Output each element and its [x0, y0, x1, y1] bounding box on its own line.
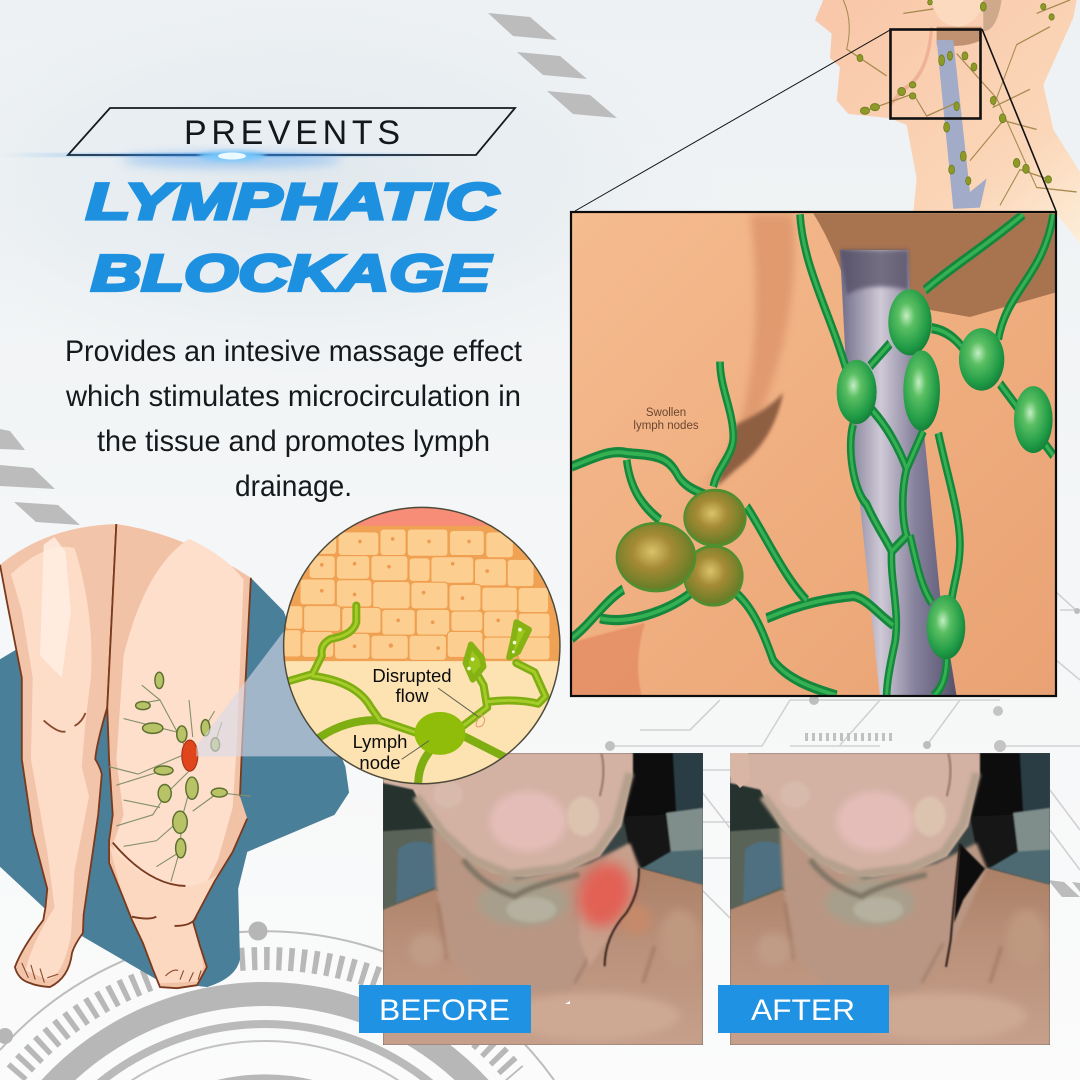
circular tech ring [0, 922, 554, 1080]
green lymph nodes [837, 289, 1053, 659]
photo: after [730, 753, 1050, 1045]
neck illustration top right [815, 0, 1080, 243]
zoom connector lines [575, 29, 1056, 211]
circle labels: Lymph [353, 731, 407, 752]
title: LYMPHATIC [86, 173, 500, 230]
swollen nodes [617, 490, 746, 605]
description text [65, 335, 523, 503]
label: after [718, 985, 889, 1033]
label: after: AFTER [751, 994, 855, 1027]
skin cells [284, 529, 550, 660]
circle labels: node [359, 752, 401, 773]
blocked sacs [465, 622, 529, 680]
description text: Provides an intesive massage effect [65, 335, 523, 368]
lymph node [415, 712, 465, 755]
lymph branches [109, 685, 251, 882]
panel label: lymph nodes [633, 420, 699, 432]
vein [840, 250, 957, 696]
vein [937, 40, 987, 209]
photo: before [383, 753, 703, 1045]
label: before: BEFORE [379, 994, 510, 1027]
circle labels [353, 665, 452, 773]
banner glow [0, 151, 440, 168]
green lymph vessels [287, 606, 545, 785]
circle labels: Disrupted [372, 665, 452, 686]
legs illustration [0, 524, 349, 988]
title [86, 173, 500, 302]
left leg [0, 524, 116, 987]
lymph vessels [572, 214, 1053, 696]
banner text: PREVENTS [184, 114, 400, 152]
description text: drainage. [235, 470, 352, 503]
description text: which stimulates microcirculation in [65, 380, 521, 413]
label: before [359, 985, 531, 1033]
swollen right leg [107, 524, 251, 988]
leg lymph nodes [136, 672, 227, 858]
description text: the tissue and promotes lymph [97, 425, 490, 458]
circuit decoration [605, 592, 1080, 918]
small white mark [565, 1001, 570, 1004]
red node [182, 740, 198, 771]
blue blob [0, 574, 349, 987]
circle labels: flow [396, 685, 429, 706]
panel: swollen lymph nodes close-up [570, 212, 1056, 696]
heading: prevents banner [0, 108, 515, 168]
magnified circle [284, 507, 564, 785]
title: BLOCKAGE [91, 244, 493, 302]
zoom wedge [196, 631, 340, 756]
panel label: Swollen [646, 407, 686, 419]
